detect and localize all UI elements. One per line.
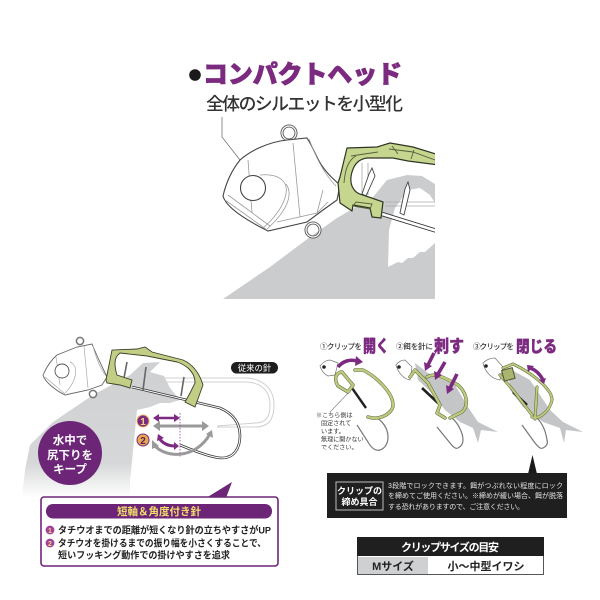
fish size cell: 小～中型イワシ	[448, 559, 524, 573]
number 2	[46, 539, 54, 548]
new hook	[132, 387, 240, 458]
step 3 label: ③クリップを	[473, 342, 514, 351]
pointer	[528, 455, 537, 474]
size cell	[358, 557, 428, 574]
arrow: swing grey	[152, 430, 213, 454]
label box: 締め具合	[341, 496, 378, 507]
subtitle: 全体のシルエットを小型化	[206, 94, 403, 114]
icon: eye	[240, 176, 266, 200]
icon: eye	[484, 364, 488, 368]
note: 固定されて	[321, 420, 351, 428]
panel: clip tightness	[327, 455, 567, 518]
head details	[45, 346, 106, 394]
head detail lines	[225, 139, 336, 230]
pins	[124, 362, 184, 396]
icon: bottom ring	[306, 223, 320, 237]
dashed guide	[179, 413, 181, 458]
icon: top ring	[282, 126, 296, 140]
number 2	[137, 434, 149, 447]
icon: eye	[397, 365, 401, 369]
hook	[522, 418, 547, 448]
callout line 2: タチウオを掛けるまでの振り幅を小さくすることで、	[58, 538, 266, 550]
callout line 1: タチウオまでの距離が短くなり針の立ちやすさがUP	[58, 524, 272, 536]
callout	[41, 497, 278, 566]
lure ring bottom	[89, 390, 97, 398]
arrow: distance 1	[153, 414, 180, 422]
fish	[508, 368, 583, 443]
step 2 diagram	[396, 353, 498, 448]
lure head	[223, 138, 340, 231]
number 1: 1	[140, 417, 146, 428]
step 1 label	[320, 337, 389, 356]
arrow: close	[527, 365, 546, 384]
note: います。	[321, 428, 345, 436]
number 1	[46, 526, 54, 535]
step 2 label: 刺す	[434, 337, 464, 356]
clip	[410, 370, 466, 418]
rod	[352, 388, 366, 408]
clip	[500, 364, 552, 419]
rod	[422, 388, 438, 403]
description	[388, 481, 563, 511]
fish silhouette	[223, 175, 435, 299]
callout line 3: 短いフッキング動作での掛けやすさを追求	[58, 550, 230, 562]
step 1 label: ①クリップを	[320, 342, 362, 351]
number 2: 2	[48, 541, 52, 548]
step 3 label	[473, 338, 557, 356]
clip loops	[336, 370, 393, 418]
panel: clip steps	[316, 337, 583, 452]
step 1 diagram	[316, 356, 393, 452]
table header: クリップサイズの目安	[401, 540, 499, 554]
step 3 diagram	[483, 358, 583, 448]
description: する恐れがありますので、ご注意ください。	[388, 502, 524, 511]
black box	[327, 473, 567, 518]
note: でください。	[321, 444, 358, 452]
clip details	[344, 146, 435, 209]
table border	[358, 538, 544, 574]
lure head	[43, 344, 107, 395]
guide lines	[362, 163, 435, 206]
badge: old hook	[231, 362, 278, 374]
label box	[336, 482, 383, 510]
green clip	[106, 347, 203, 407]
hook shank	[382, 214, 437, 231]
pins	[362, 168, 410, 215]
title bullet	[189, 69, 201, 81]
panel: compact head	[189, 61, 439, 299]
lure ring top	[76, 337, 84, 345]
callout header	[46, 504, 272, 518]
title text: コンパクトヘッド	[203, 61, 402, 89]
table header	[357, 537, 544, 556]
hook	[357, 418, 388, 450]
badge: keep tail down: 水中で	[53, 433, 87, 447]
arrow: old distance	[153, 421, 209, 431]
note: ※こちら側は	[316, 412, 353, 420]
arrow: swing purple	[157, 434, 179, 450]
badge: keep tail down: 尻下りを	[47, 449, 93, 462]
panel: short shank hook	[22, 337, 278, 566]
arrow: open	[338, 356, 363, 367]
label box: クリップの	[337, 486, 382, 496]
lure head	[320, 360, 338, 376]
description: を締めてご使用ください。※締めが緩い場合、餌が脱落	[388, 491, 563, 500]
badge: keep tail down	[38, 421, 102, 485]
note: 無理に開かない	[321, 436, 364, 444]
lure head	[396, 360, 412, 380]
leader	[330, 388, 353, 412]
table: clip size	[357, 537, 544, 574]
clip head	[502, 368, 515, 381]
rod	[513, 392, 527, 405]
badge: keep tail down: キープ	[53, 463, 87, 476]
number 1: 1	[48, 528, 52, 535]
badge: old hook: 従来の針	[238, 363, 272, 373]
old hook	[130, 378, 274, 427]
fish	[415, 363, 498, 443]
callout pointer	[206, 482, 232, 498]
lure head	[483, 358, 503, 380]
callout heading text: 短軸＆角度付き針	[117, 505, 201, 518]
arrows: insert	[428, 353, 457, 388]
size cell: Mサイズ	[372, 559, 414, 573]
icon: eye	[322, 365, 326, 369]
number 2: 2	[140, 436, 146, 447]
step 2 label: ②餌を針に	[396, 341, 433, 351]
leader line	[222, 117, 240, 160]
step 2 label	[396, 337, 464, 356]
icon: eye	[55, 364, 69, 378]
description: 3段階でロックできます。餌がつぶれない程度にロック	[388, 481, 563, 490]
step 3 label: 閉じる	[516, 338, 557, 356]
hook	[437, 418, 463, 448]
green clip	[338, 143, 439, 218]
step 1 label: 開く	[363, 337, 389, 356]
note	[316, 412, 364, 452]
number 1	[137, 415, 149, 428]
arrow heads	[424, 362, 454, 394]
fish silhouette	[22, 362, 180, 497]
